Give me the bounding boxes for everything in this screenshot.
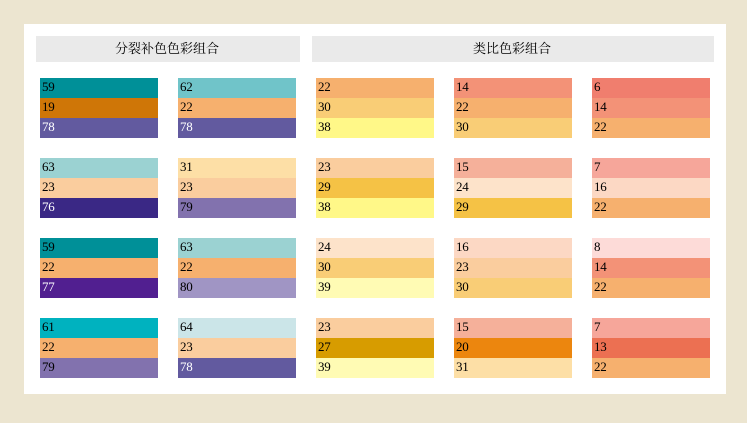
swatch: 59 22 77 xyxy=(40,238,158,298)
swatch: 61 22 79: 61 xyxy=(42,319,54,334)
swatch: 63 22 80: 63 xyxy=(180,239,192,254)
swatch: 63 23 76: 23 xyxy=(42,179,54,194)
swatch: 31 23 79: 31 xyxy=(180,159,192,174)
swatch: 16 23 30 xyxy=(454,238,572,298)
swatch: 15 20 31: 31 xyxy=(456,359,468,374)
swatch: 59 22 77: 77 xyxy=(42,279,54,294)
swatch: 64 23 78: 23 xyxy=(180,339,192,354)
swatch: 7 13 22: 22 xyxy=(594,359,606,374)
swatch: 23 29 38 xyxy=(316,158,434,218)
swatch: 8 14 22: 22 xyxy=(594,279,606,294)
swatch: 15 24 29: 29 xyxy=(456,199,468,214)
swatch: 23 27 39 xyxy=(316,318,434,378)
swatch: 6 14 22: 22 xyxy=(594,119,606,134)
swatch: 63 22 80: 22 xyxy=(180,259,192,274)
swatch: 23 27 39: 27 xyxy=(318,339,330,354)
swatch: 24 30 39: 24 xyxy=(318,239,330,254)
swatch: 63 23 76: 63 xyxy=(42,159,54,174)
swatch: 23 27 39: 39 xyxy=(318,359,330,374)
swatch: 24 30 39 xyxy=(316,238,434,298)
swatch: 23 29 38: 29 xyxy=(318,179,330,194)
swatch: 24 30 39: 39 xyxy=(318,279,330,294)
swatch: 24 30 39: 30 xyxy=(318,259,330,274)
swatch: 62 22 78: 62 xyxy=(180,79,192,94)
heading: analogous: 类比色彩组合 xyxy=(473,41,551,56)
swatch: 16 23 30: 23 xyxy=(456,259,468,274)
swatch: 64 23 78: 78 xyxy=(180,359,192,374)
swatch: 15 20 31: 15 xyxy=(456,319,468,334)
swatch: 22 30 38: 38 xyxy=(318,119,330,134)
swatch: 14 22 30: 30 xyxy=(456,119,468,134)
swatch: 8 14 22: 8 xyxy=(594,239,600,254)
swatch: 59 19 78: 59 xyxy=(42,79,54,94)
swatch: 63 23 76 xyxy=(40,158,158,218)
swatch: 31 23 79: 23 xyxy=(180,179,192,194)
swatch: 7 16 22 xyxy=(592,158,710,218)
swatch: 59 19 78: 78 xyxy=(42,119,54,134)
swatch: 22 30 38 xyxy=(316,78,434,138)
swatch: 64 23 78: 64 xyxy=(180,319,192,334)
swatch: 6 14 22: 14 xyxy=(594,99,606,114)
heading: split complementary: 分裂补色色彩组合 xyxy=(115,41,219,56)
swatch: 59 19 78 xyxy=(40,78,158,138)
swatch: 62 22 78: 78 xyxy=(180,119,192,134)
swatch: 23 29 38: 38 xyxy=(318,199,330,214)
swatch: 61 22 79: 22 xyxy=(42,339,54,354)
swatch: 7 16 22: 7 xyxy=(594,159,600,174)
swatch: 7 13 22 xyxy=(592,318,710,378)
swatch: 8 14 22: 14 xyxy=(594,259,606,274)
swatch: 7 13 22: 7 xyxy=(594,319,600,334)
swatch: 16 23 30: 30 xyxy=(456,279,468,294)
swatch: 6 14 22: 6 xyxy=(594,79,600,94)
swatch: 15 20 31 xyxy=(454,318,572,378)
swatch: 16 23 30: 16 xyxy=(456,239,468,254)
swatch: 15 20 31: 20 xyxy=(456,339,468,354)
heading: analogous xyxy=(312,36,714,62)
swatch: 6 14 22 xyxy=(592,78,710,138)
swatch: 7 16 22: 22 xyxy=(594,199,606,214)
swatch: 59 22 77: 22 xyxy=(42,259,54,274)
swatch: 22 30 38: 30 xyxy=(318,99,330,114)
swatch: 59 22 77: 59 xyxy=(42,239,54,254)
swatch: 61 22 79 xyxy=(40,318,158,378)
swatch: 31 23 79 xyxy=(178,158,296,218)
swatch: 63 23 76: 76 xyxy=(42,199,54,214)
swatch: 31 23 79: 79 xyxy=(180,199,192,214)
swatch: 7 13 22: 13 xyxy=(594,339,606,354)
swatch: 59 19 78: 19 xyxy=(42,99,54,114)
swatch: 23 27 39: 23 xyxy=(318,319,330,334)
swatch: 8 14 22 xyxy=(592,238,710,298)
swatch: 62 22 78: 22 xyxy=(180,99,192,114)
swatch: 14 22 30 xyxy=(454,78,572,138)
swatch: 23 29 38: 23 xyxy=(318,159,330,174)
swatch: 62 22 78 xyxy=(178,78,296,138)
swatch: 15 24 29: 24 xyxy=(456,179,468,194)
swatch: 61 22 79: 79 xyxy=(42,359,54,374)
swatch: 22 30 38: 22 xyxy=(318,79,330,94)
swatch: 14 22 30: 22 xyxy=(456,99,468,114)
swatch: 64 23 78 xyxy=(178,318,296,378)
swatch: 15 24 29 xyxy=(454,158,572,218)
swatch: 14 22 30: 14 xyxy=(456,79,468,94)
swatch: 63 22 80: 80 xyxy=(180,279,192,294)
heading: split complementary xyxy=(36,36,300,62)
swatch: 7 16 22: 16 xyxy=(594,179,606,194)
swatch: 15 24 29: 15 xyxy=(456,159,468,174)
swatch: 63 22 80 xyxy=(178,238,296,298)
